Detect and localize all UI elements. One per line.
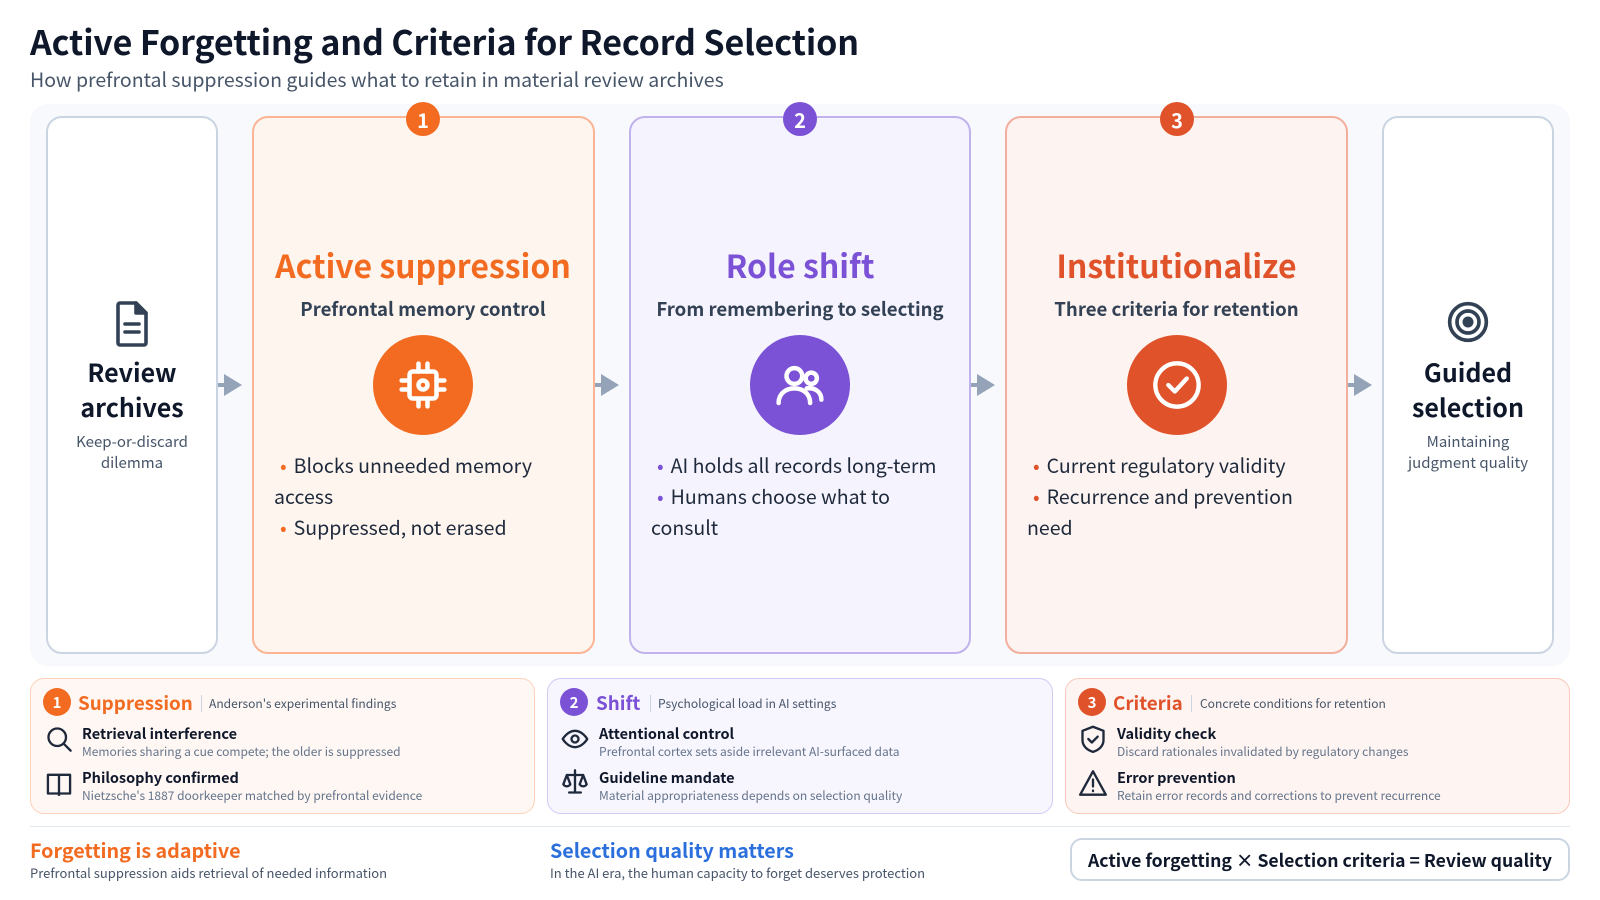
- icon: eye: [562, 730, 588, 748]
- panel: criteria details: [1065, 678, 1570, 814]
- badge 1: 1: [53, 692, 61, 712]
- takeaway: forgetting is adaptive: [30, 835, 387, 882]
- icon: warning triangle: [1079, 770, 1107, 796]
- bullet list: • Suppressed, not erased: [280, 512, 507, 541]
- bullet list: • AI holds all records long-term: [657, 450, 937, 479]
- badge 2: [560, 688, 588, 716]
- text: keep-or-discard: dilemma: [101, 452, 163, 473]
- badge 3: 3: [1088, 692, 1096, 712]
- icon: target: [1448, 302, 1488, 342]
- heading: guided selection: [1412, 354, 1524, 425]
- badge 1: [43, 688, 71, 716]
- text: keep-or-discard: [76, 431, 188, 473]
- takeaway: selection quality matters: [550, 835, 925, 882]
- item description: Discard rationales invalidated by regulatory changes: [1117, 743, 1408, 760]
- panel: shift details: [547, 678, 1053, 814]
- card: institutionalize: [1005, 116, 1348, 654]
- icon: shield check: [1081, 726, 1105, 753]
- heading: review archives: [80, 354, 184, 425]
- item title: Philosophy confirmed: [82, 767, 239, 788]
- icon: users: [750, 335, 850, 435]
- item title: Attentional control: [599, 723, 734, 744]
- bullet list: [1027, 450, 1293, 541]
- subheading: Concrete conditions for retention: [1200, 695, 1386, 712]
- subheading: Prefrontal memory control: [300, 295, 546, 322]
- arrow: [218, 374, 242, 396]
- title: Active Forgetting and Criteria for Record Selection: [30, 16, 859, 65]
- item description: Retain error records and corrections to prevent recurrence: [1117, 787, 1441, 804]
- bullet list: • Current regulatory validity: [1033, 450, 1286, 479]
- subheading: Anderson's experimental findings: [209, 695, 396, 712]
- heading: guided selection: Guided: [1424, 354, 1512, 390]
- badge 3: [1160, 102, 1194, 136]
- icon: search: [47, 727, 72, 752]
- takeaway heading: Selection quality matters: [550, 835, 794, 864]
- heading: guided selection: selection: [1412, 389, 1524, 425]
- heading: review archives: Review: [87, 354, 177, 390]
- bullet list: • Blocks unneeded memory access: [274, 450, 532, 510]
- card: guided selection: [1382, 116, 1554, 654]
- heading: Criteria: [1113, 689, 1183, 716]
- text: maintaining judgment quality: Maintaining: [1427, 431, 1509, 452]
- text: keep-or-discard: Keep-or-discard: [76, 431, 188, 452]
- arrow: [595, 374, 619, 396]
- item description: Memories sharing a cue compete; the older is suppressed: [82, 743, 401, 760]
- panel: process flow: [30, 104, 1570, 666]
- text: maintaining judgment quality: [1407, 431, 1528, 473]
- arrow: [971, 374, 995, 396]
- subtitle: How prefrontal suppression guides what to retain in material review archives: [30, 64, 724, 93]
- panel: suppression details: [30, 678, 535, 814]
- formula box: [1070, 838, 1570, 881]
- bullet list: • Humans choose what to consult: [651, 481, 890, 541]
- icon: check circle: [1126, 335, 1226, 435]
- card: role shift: [629, 116, 971, 654]
- bullet list: [651, 450, 937, 541]
- item description: Prefrontal cortex sets aside irrelevant AI-surfaced data: [599, 743, 900, 760]
- takeaway heading: Forgetting is adaptive: [30, 835, 241, 864]
- card: review archives: [46, 116, 218, 654]
- badge 1: 1: [417, 104, 429, 134]
- item description: Nietzsche's 1887 doorkeeper matched by prefrontal evidence: [82, 787, 422, 804]
- item title: Error prevention: [1117, 767, 1236, 788]
- icon: scale: [562, 769, 588, 794]
- badge 2: 2: [794, 104, 806, 134]
- badge 3: 3: [1171, 104, 1183, 134]
- icon: document: [116, 301, 148, 347]
- arrow: [1348, 374, 1372, 396]
- heading: Suppression: [78, 689, 193, 716]
- item title: Retrieval interference: [82, 723, 237, 744]
- badge 1: [406, 102, 440, 136]
- badge 2: [783, 102, 817, 136]
- heading: review archives: archives: [80, 389, 184, 425]
- item title: Validity check: [1117, 723, 1216, 744]
- heading: Institutionalize: [1056, 242, 1297, 288]
- subheading: Three criteria for retention: [1054, 295, 1299, 322]
- subheading: Psychological load in AI settings: [658, 695, 836, 712]
- bullet list: [274, 450, 532, 541]
- takeaway text: In the AI era, the human capacity to forget deserves protection: [550, 863, 925, 882]
- card: active suppression: [252, 116, 595, 654]
- heading: Shift: [596, 689, 640, 716]
- takeaway text: Prefrontal suppression aids retrieval of needed information: [30, 863, 387, 882]
- icon: book: [46, 774, 72, 796]
- formula box: Active forgetting × Selection criteria = Review quality: [1088, 848, 1552, 872]
- heading: Active suppression: [275, 242, 571, 288]
- badge 2: 2: [570, 692, 578, 712]
- subheading: From remembering to selecting: [656, 295, 944, 322]
- bullet list: • Recurrence and prevention need: [1027, 481, 1293, 541]
- heading: Role shift: [726, 242, 874, 288]
- icon: chip: [372, 335, 472, 435]
- item description: Material appropriateness depends on selection quality: [599, 787, 902, 804]
- badge 3: [1078, 688, 1106, 716]
- item title: Guideline mandate: [599, 767, 735, 788]
- text: maintaining judgment quality: judgment quality: [1408, 452, 1528, 473]
